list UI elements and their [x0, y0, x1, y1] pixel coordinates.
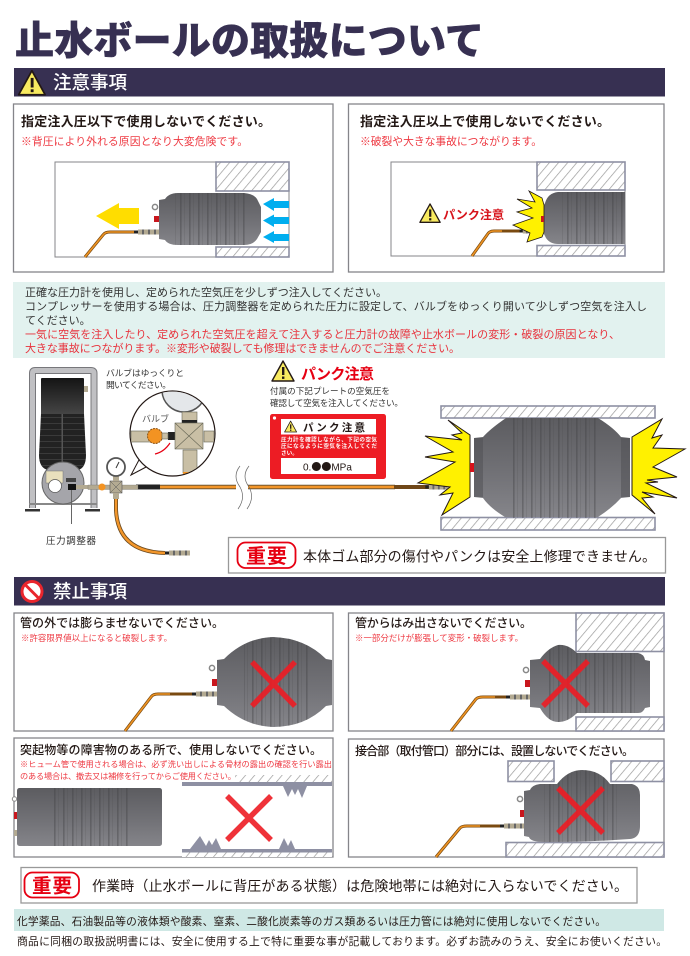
illustration: ball inflated in open air — [125, 635, 332, 731]
heading: burst caution: 確認して空気を注入してください。 — [270, 397, 403, 408]
plate: burst caution label: パンク注意 — [303, 421, 366, 434]
panel: above specified pressure: 指定注入圧以上で使用しないでください。 — [360, 114, 610, 129]
callout: valve close-up — [129, 390, 216, 477]
section header: cautions — [14, 68, 665, 96]
label: open valve slowly: バルブはゆっくりと — [106, 367, 184, 378]
callout: valve close-up: バルブ — [142, 413, 169, 424]
panel: above specified pressure — [348, 104, 664, 272]
heading: burst caution: パンク注意 — [301, 365, 374, 383]
illustration: ball pushed out by back pressure — [55, 162, 289, 257]
text block: injection notes: 一気に空気を注入したり、定められた空気圧を超えて注入すると圧力計の故障や止水ボールの変形・破裂の原因となり、 — [25, 327, 620, 341]
plate: burst caution label: 圧になるように空気を注入してくだ — [281, 442, 377, 450]
callout: important danger zone — [21, 868, 637, 903]
note: prohibited substances — [14, 909, 664, 931]
panel: do not inflate outside pipe — [14, 613, 333, 731]
footer note: 商品に同梱の取扱説明書には、安全に使用する上で特に重要な事が記載しております。必ずお読みのうえ、安全にお使いください。 — [17, 934, 667, 948]
panel: do not use near obstructions: 突起物等の障害物のある所で、使用しないでください。 — [20, 742, 322, 757]
panel: do not install at joints — [348, 739, 664, 857]
text block: injection notes: コンプレッサーを使用する場合は、圧力調整器を定められた圧力に設定して、バルブをゆっくり開いて少しずつ空気を注入し — [25, 299, 647, 313]
section header: prohibitions — [14, 577, 665, 606]
panel: do not protrude from pipe: ※一部分だけが膨張して変形・破裂します。 — [355, 633, 523, 643]
section header: cautions: 注意事項 — [53, 72, 127, 93]
panel: do not use near obstructions — [12, 738, 333, 857]
label: open valve slowly: 開いてください。 — [106, 380, 171, 390]
callout: important repair notice — [228, 538, 666, 573]
plate: burst caution label: 0.●●MPa — [303, 458, 352, 474]
illustration: ball at lateral junction — [436, 761, 664, 857]
plate: burst caution label: さい。 — [281, 450, 298, 457]
panel: do not protrude from pipe: 管からはみ出さないでください。 — [355, 615, 532, 630]
illustration: burst warning: パンク注意 — [443, 207, 504, 222]
panel: do not install at joints: 接合部（取付管口）部分には、設置しないでください。 — [355, 743, 634, 758]
panel: below specified pressure: ※背圧により外れる原因となり大変危険です。 — [21, 134, 248, 148]
callout: important danger zone: 作業時（止水ボールに背圧がある状態）は危険地帯には絶対に入らないでください。 — [92, 878, 628, 894]
panel: below specified pressure — [14, 104, 333, 272]
panel: do not inflate outside pipe: 管の外では膨らませないでください。 — [20, 615, 224, 630]
panel: do not use near obstructions: のある場合は、撤去又は補修を行ってからご使用ください。 — [20, 771, 236, 781]
text block: injection notes: てください。 — [25, 314, 91, 327]
text block: injection notes: 正確な圧力計を使用し、定められた空気圧を少しずつ注入してください。 — [25, 285, 387, 299]
plate: burst caution label — [270, 414, 386, 479]
heading: burst caution — [270, 361, 403, 408]
diagram: gauge and hoses — [88, 458, 448, 556]
diagram: compressor — [25, 370, 100, 524]
label: open valve slowly — [106, 367, 184, 390]
plate: burst caution label: 圧力計を確認しながら、下記の空気 — [281, 436, 377, 444]
callout: important repair notice: 本体ゴム部分の傷付やパンクは安全上修理できません。 — [303, 548, 656, 564]
illustration: burst warning — [391, 162, 625, 256]
panel: do not protrude from pipe — [348, 613, 664, 731]
text block: injection notes: 大きな事故につながります。※変形や破裂しても修理はできませんのでご注意ください。 — [25, 341, 460, 355]
panel: below specified pressure: 指定注入圧以下で使用しないでください。 — [21, 114, 271, 129]
illustration: ball protruding from pipe — [451, 613, 664, 731]
callout: important danger zone: 重要 — [32, 876, 72, 898]
title: 止水ボールの取扱について — [15, 20, 484, 64]
panel: above specified pressure: ※破裂や大きな事故につながります。 — [360, 134, 542, 148]
panel: do not use near obstructions: ※ヒューム管で使用される場合は、必ず洗い出しによる骨材の露出の確認を行い露出 — [20, 759, 332, 769]
panel: do not inflate outside pipe: ※許容限界値以上になると破裂します。 — [21, 633, 172, 643]
callout: important repair notice: 重要 — [246, 545, 287, 568]
diagram: over-inflated ball bursting — [418, 406, 685, 530]
illustration: pipe with protrusions — [12, 775, 332, 857]
note: prohibited substances: 化学薬品、石油製品等の液体類や酸素、窒素、二酸化炭素等のガス類あるいは圧力管には絶対に使用しないでください。 — [17, 915, 606, 928]
label: pressure regulator: 圧力調整器 — [46, 535, 96, 547]
heading: burst caution: 付属の下記プレートの空気圧を — [270, 385, 390, 396]
text block: injection notes — [13, 282, 665, 358]
section header: prohibitions: 禁止事項 — [53, 581, 127, 602]
